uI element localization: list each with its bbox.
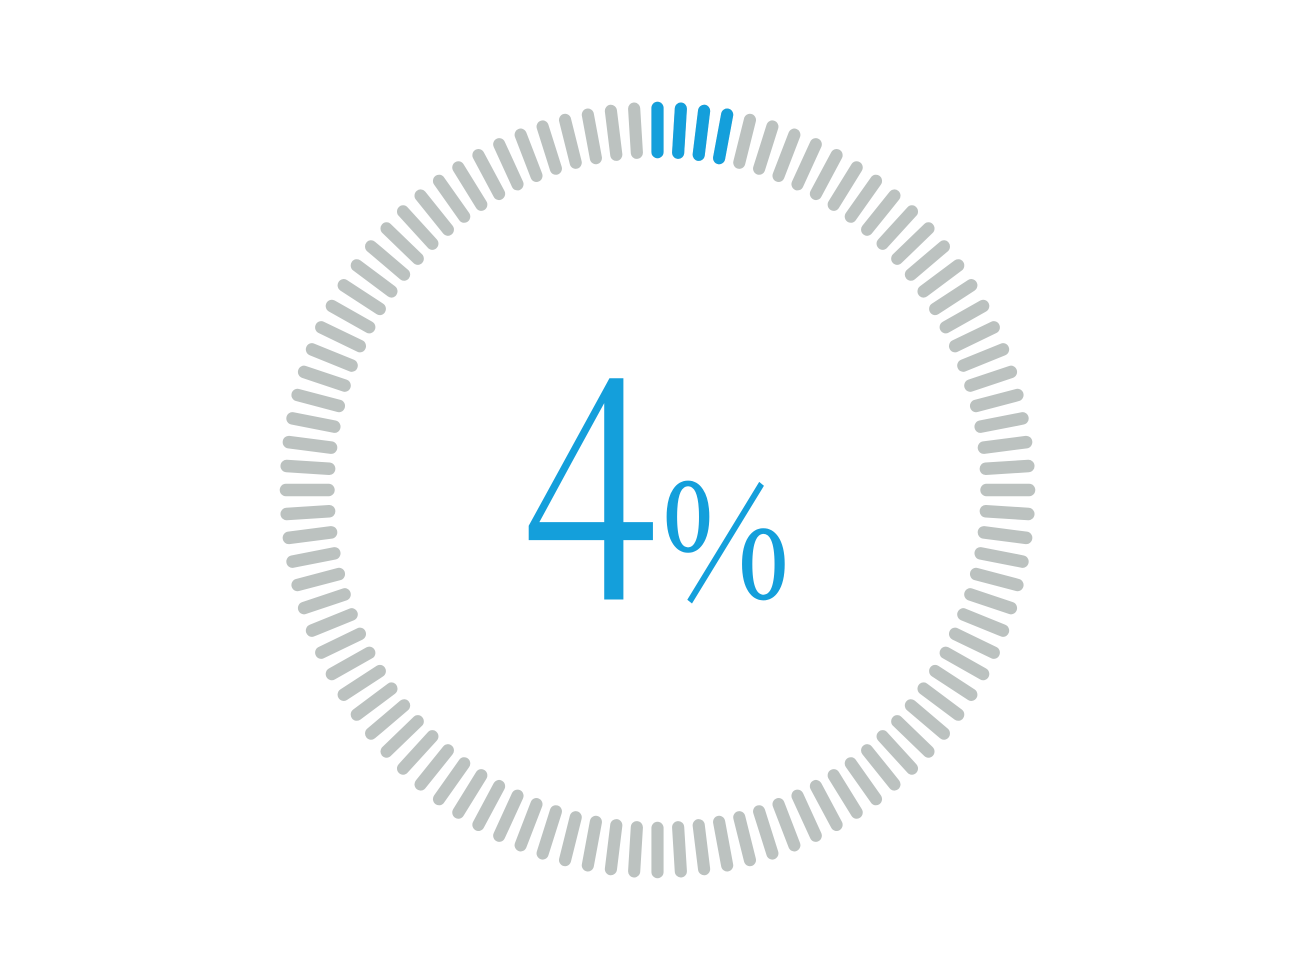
filled ticks: 4 blue segments: [658, 108, 727, 158]
center value: 4%: [521, 246, 790, 681]
digit 4: 4: [521, 246, 658, 681]
radial tick ring: [275, 97, 1040, 883]
percent sign: %: [661, 416, 790, 643]
track ticks: gray segments: [275, 97, 1040, 883]
